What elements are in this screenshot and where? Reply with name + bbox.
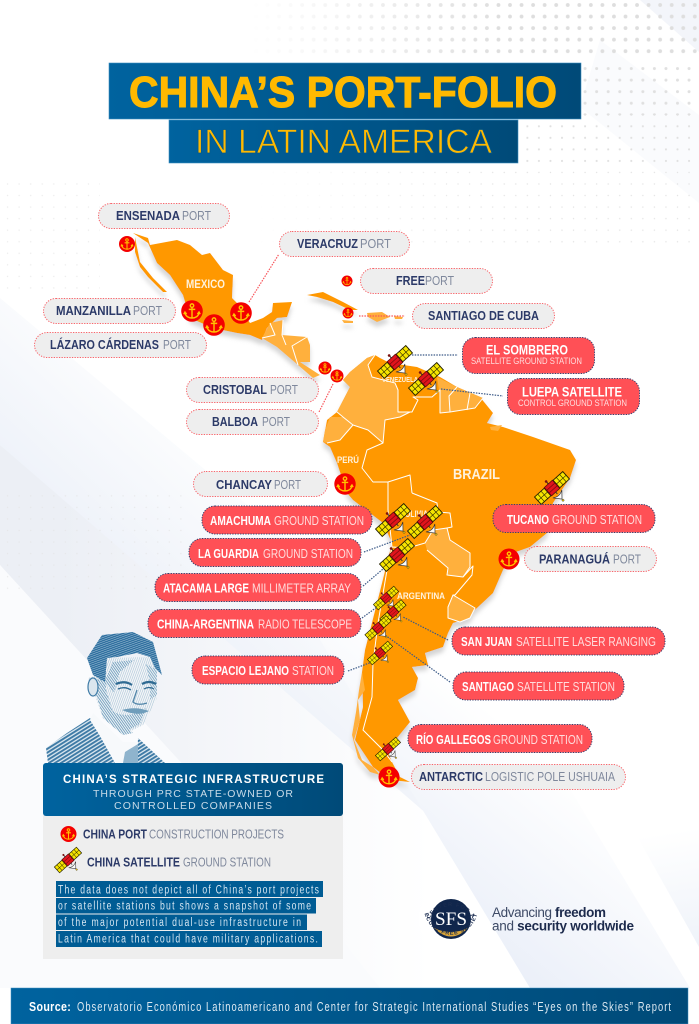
label: Lazaro Cardenas port: LÁZARO CÁRDENAS bbox=[50, 337, 159, 352]
label: Lazaro Cardenas port bbox=[34, 332, 206, 358]
map labels bbox=[186, 277, 500, 601]
label: Chancay port: PORT bbox=[274, 478, 301, 492]
legend note: Latin America that could have military applications. bbox=[58, 933, 318, 946]
legend note: or satellite stations but shows a snapshot of some bbox=[58, 900, 311, 913]
legend: port item: CHINA PORT bbox=[83, 828, 147, 842]
map labels: BRAZIL bbox=[453, 466, 500, 483]
legend header bbox=[43, 763, 343, 816]
label: Luepa satellite station: LUEPA SATELLITE bbox=[522, 384, 622, 400]
portrait illustration bbox=[46, 632, 165, 763]
label: Tucano ground station: GROUND STATION bbox=[552, 513, 642, 527]
logo: Center for a Secure Free Society: SFS bbox=[435, 909, 467, 930]
label: Santiago de Cuba: SANTIAGO DE CUBA bbox=[428, 309, 539, 323]
logo: Center for a Secure Free Society: CENTER FOR A bbox=[426, 902, 475, 918]
label: Antarctic logistic pole: ANTARCTIC bbox=[419, 770, 483, 784]
label: San Juan satellite laser ranging: SAN JUAN bbox=[461, 635, 512, 649]
tagline: and security worldwide bbox=[492, 918, 634, 934]
label: Tucano ground station: TUCANO bbox=[507, 513, 549, 527]
tagline bbox=[492, 905, 634, 934]
legend header: CONTROLLED COMPANIES bbox=[114, 800, 272, 812]
label: La Guardia ground station: LA GUARDIA bbox=[198, 547, 259, 561]
label: Manzanilla port bbox=[44, 298, 176, 324]
source footer: Source: bbox=[29, 999, 71, 1014]
label: El Sombrero station: SATELLITE GROUND STATION bbox=[471, 356, 582, 366]
label: Veracruz port bbox=[280, 232, 410, 256]
legend header: CHINA’S STRATEGIC INFRASTRUCTURE bbox=[63, 774, 324, 786]
tagline: Advancing freedom bbox=[492, 905, 606, 920]
label: Balboa port: PORT bbox=[262, 415, 290, 429]
source footer bbox=[11, 988, 688, 1024]
map labels: MEXICO bbox=[186, 277, 225, 291]
map labels: ARGENTINA bbox=[397, 591, 445, 601]
port markers bbox=[119, 236, 520, 788]
legend: satellite item bbox=[52, 844, 271, 880]
legend note bbox=[56, 881, 323, 947]
label: Santiago satellite station: SATELLITE STATION bbox=[517, 680, 615, 694]
map labels: PERÚ bbox=[337, 454, 359, 465]
label: China-Argentina radio telescope bbox=[148, 610, 361, 638]
label: Freeport: PORT bbox=[425, 274, 454, 288]
label: Freeport bbox=[360, 268, 492, 294]
logo: Center for a Secure Free Society: SECURE FREE SOCIETY bbox=[424, 912, 477, 935]
label: China-Argentina radio telescope: RADIO TELESCOPE bbox=[258, 618, 352, 632]
label: Rio Gallegos ground station: RÍO GALLEGOS bbox=[416, 732, 491, 747]
label: Cristobal port: PORT bbox=[270, 383, 298, 397]
legend panel bbox=[43, 763, 343, 959]
label: Atacama Large Millimeter Array: ATACAMA LARGE bbox=[163, 582, 249, 596]
label: Freeport: FREE bbox=[396, 274, 425, 288]
label: Balboa port bbox=[186, 410, 318, 434]
label: China-Argentina radio telescope: CHINA-ARGENTINA bbox=[157, 618, 254, 632]
label: Espacio Lejano station bbox=[192, 656, 344, 684]
title banner: CHINA’S PORT-FOLIO bbox=[129, 68, 557, 117]
label: Chancay port: CHANCAY bbox=[216, 478, 273, 492]
label: Manzanilla port: PORT bbox=[133, 304, 162, 318]
label: Cristobal port: CRISTOBAL bbox=[203, 383, 267, 397]
label: El Sombrero station bbox=[462, 338, 594, 374]
label: Atacama Large Millimeter Array: MILLIMETER ARRAY bbox=[252, 582, 352, 596]
map labels: BOLIVIA bbox=[400, 509, 428, 519]
legend note: The data does not depict all of China’s port projects bbox=[58, 884, 319, 897]
label: Manzanilla port: MANZANILLA bbox=[56, 304, 131, 318]
legend: port item: CONSTRUCTION PROJECTS bbox=[149, 828, 284, 842]
source footer: Observatorio Económico Latinoamericano and Center for Strategic International Studies “Eyes on the Skies” Report bbox=[77, 1001, 672, 1014]
label: Ensenada port bbox=[98, 204, 230, 228]
legend: satellite item: CHINA SATELLITE bbox=[87, 856, 180, 870]
dot pattern: left side bbox=[0, 180, 190, 590]
label: Espacio Lejano station: STATION bbox=[292, 664, 334, 678]
label: Atacama Large Millimeter Array bbox=[155, 574, 361, 602]
label: Cristobal port bbox=[186, 378, 318, 402]
dot pattern: top right bbox=[314, 3, 697, 242]
label: Paranagua port: PARANAGUÁ bbox=[539, 552, 610, 566]
label: El Sombrero station: EL SOMBRERO bbox=[486, 342, 568, 358]
label: Antarctic logistic pole bbox=[412, 764, 626, 790]
label: Paranagua port bbox=[524, 546, 656, 572]
label: Chancay port bbox=[194, 472, 328, 496]
label: Luepa satellite station bbox=[508, 378, 640, 414]
label: Espacio Lejano station: ESPACIO LEJANO bbox=[202, 664, 289, 678]
label: San Juan satellite laser ranging: SATELLITE LASER RANGING bbox=[516, 635, 656, 649]
subtitle banner: IN LATIN AMERICA bbox=[195, 123, 492, 161]
label: San Juan satellite laser ranging bbox=[452, 627, 665, 655]
map: Latin America bbox=[133, 233, 576, 782]
label: Santiago de Cuba bbox=[412, 304, 554, 328]
label: Balboa port: BALBOA bbox=[212, 415, 258, 429]
legend: port item bbox=[60, 826, 284, 842]
satellite markers bbox=[362, 342, 578, 768]
legend body background bbox=[43, 800, 343, 959]
label: Veracruz port: VERACRUZ bbox=[297, 237, 358, 251]
land masses bbox=[133, 233, 576, 782]
label: Ensenada port: PORT bbox=[182, 209, 211, 223]
label: Lazaro Cardenas port: PORT bbox=[163, 338, 191, 352]
country borders bbox=[262, 320, 483, 762]
label: Santiago satellite station bbox=[453, 672, 624, 700]
label: Paranagua port: PORT bbox=[613, 552, 641, 566]
logo: Center for a Secure Free Society bbox=[424, 899, 477, 939]
label: Amachuma ground station: GROUND STATION bbox=[274, 514, 364, 528]
connector lines bbox=[249, 254, 503, 682]
label: Santiago satellite station: SANTIAGO bbox=[462, 680, 514, 694]
label: Veracruz port: PORT bbox=[360, 237, 391, 251]
label: Tucano ground station bbox=[493, 504, 655, 532]
label: La Guardia ground station bbox=[189, 538, 361, 566]
label: Ensenada port: ENSENADA bbox=[116, 209, 180, 223]
label: Rio Gallegos ground station: GROUND STATION bbox=[493, 733, 583, 747]
label: Antarctic logistic pole: LOGISTIC POLE USHUAIA bbox=[485, 770, 616, 784]
label: Luepa satellite station: CONTROL GROUND STATION bbox=[518, 398, 627, 408]
legend note: of the major potential dual-use infrastructure in bbox=[58, 917, 301, 929]
label: Amachuma ground station bbox=[202, 506, 372, 534]
label: La Guardia ground station: GROUND STATION bbox=[263, 547, 353, 561]
label: Amachuma ground station: AMACHUMA bbox=[210, 514, 271, 528]
label: Rio Gallegos ground station bbox=[408, 724, 592, 752]
legend header: THROUGH PRC STATE-OWNED OR bbox=[93, 788, 293, 800]
map labels: VENEZUELA bbox=[382, 377, 418, 384]
legend: satellite item: GROUND STATION bbox=[183, 856, 271, 870]
